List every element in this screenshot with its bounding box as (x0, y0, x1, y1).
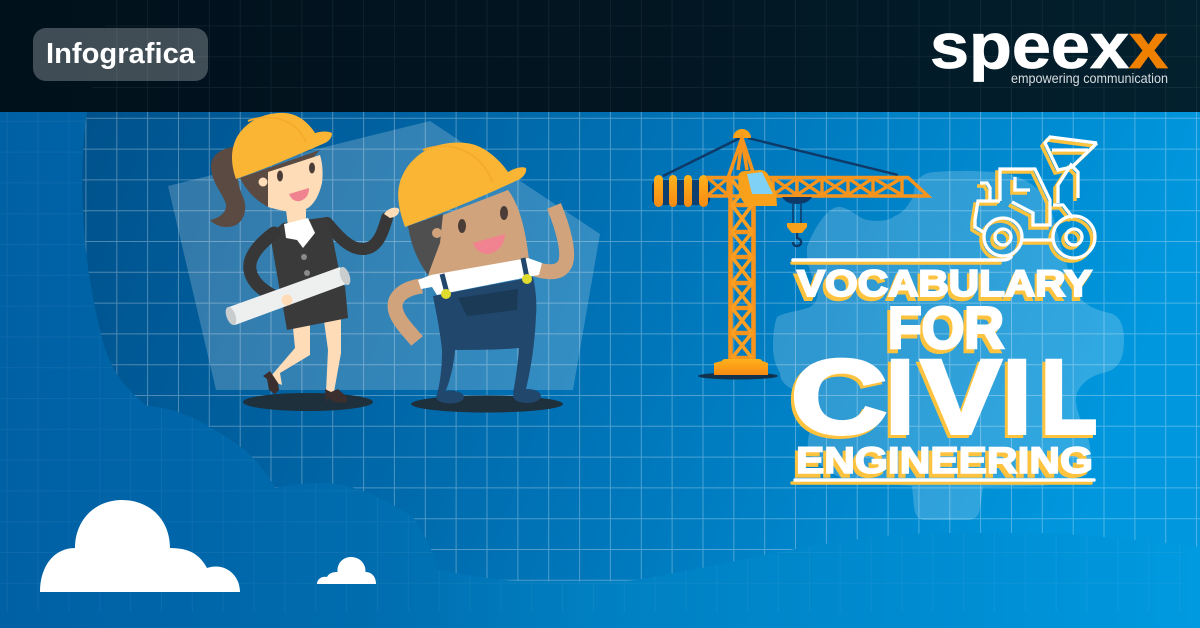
jacket buttons (301, 254, 307, 260)
crane A-frame (728, 138, 755, 178)
crane top (733, 129, 751, 138)
woman hand (384, 208, 399, 218)
icon: large cloud (40, 500, 240, 592)
man shadow (411, 396, 563, 412)
woman eyes (277, 170, 283, 182)
crane cab (738, 170, 777, 206)
cab window (747, 172, 773, 194)
man eyes (458, 219, 466, 233)
icon: loader (975, 137, 1097, 258)
skirt (280, 286, 348, 330)
woman left arm (250, 233, 280, 299)
title line: CIVIL shadow: I (883, 342, 911, 459)
character: man engineer (395, 143, 567, 412)
overalls pocket (458, 289, 518, 316)
title line: CIVIL: I (1003, 339, 1031, 456)
jib (706, 177, 928, 196)
ponytail (210, 147, 245, 227)
faint grid on top band (92, 0, 1200, 112)
title line: CIVIL shadow: V (918, 342, 998, 459)
woman mouth (289, 188, 309, 201)
title line: FOR: FOR (888, 296, 1004, 361)
title line: CIVIL shadow: I (1000, 342, 1028, 459)
crane stays (663, 138, 898, 176)
man left arm (395, 286, 422, 341)
icon: small cloud (317, 557, 376, 584)
neck (286, 206, 306, 226)
man shirt (418, 258, 542, 295)
collar (284, 218, 315, 248)
man feet (436, 390, 464, 404)
title line: ENGINEERING: ENGINEERING (796, 440, 1093, 481)
crane trolley (782, 197, 812, 204)
crane cables (793, 204, 801, 224)
badge: Infografica (33, 28, 208, 81)
woman legs (271, 318, 341, 392)
character: woman engineer (210, 113, 399, 411)
woman right arm (327, 218, 387, 249)
overall buttons (441, 289, 451, 299)
crane base (714, 359, 768, 375)
woman hard hat (232, 113, 332, 179)
blueprint grid (82, 112, 1200, 582)
title line: CIVIL shadow: C (788, 342, 884, 459)
backdrop polygon behind characters (168, 121, 600, 390)
logo: speexx: speex x (930, 10, 1168, 82)
hard hat ridge (248, 117, 306, 142)
panel behind title (773, 171, 1124, 520)
blueprint roll (224, 266, 352, 326)
man right arm (535, 206, 567, 272)
man hat ridge (423, 146, 493, 183)
mast bracing (732, 180, 752, 358)
overall straps (442, 258, 527, 293)
icon: tower crane (652, 129, 928, 380)
jacket (270, 217, 345, 292)
title line: CIVIL: C (791, 339, 887, 456)
icon: loader, yellow shadow (972, 140, 1094, 261)
woman ear (258, 178, 268, 186)
title line: VOCABULARY: VOCABULARY (797, 263, 1092, 304)
top band (0, 0, 1200, 112)
counterweight (652, 175, 710, 207)
title line: CIVIL shadow: L (1038, 342, 1094, 459)
title line: CIVIL: V (921, 339, 1001, 456)
logo: speexx: empowering communication (1011, 71, 1168, 86)
faint grid on blob (0, 112, 1183, 612)
title line: VOCABULARY shadow: VOCABULARY (794, 267, 1090, 308)
title: Vocabulary for Civil Engineering (788, 263, 1097, 485)
title line: FOR shadow: FOR (885, 300, 1001, 365)
top title underline (792, 257, 1011, 263)
woman hand on roll (282, 294, 292, 306)
woman shadow (243, 393, 373, 411)
man overalls (433, 277, 536, 395)
woman face (268, 155, 323, 212)
bottom title underline (792, 480, 1094, 483)
man head (428, 190, 529, 277)
man mouth (473, 234, 505, 254)
woman shoes (263, 371, 347, 403)
hair behind face (240, 150, 320, 207)
man hard hat (398, 143, 526, 227)
crane hook block (787, 223, 807, 233)
title line: ENGINEERING shadow: ENGINEERING (793, 444, 1089, 485)
man hair (408, 214, 443, 275)
mast (730, 178, 754, 361)
title line: CIVIL: I (886, 339, 914, 456)
crane hook (793, 233, 801, 246)
man ear (432, 228, 442, 238)
crane shadow (698, 372, 778, 380)
title line: CIVIL: L (1041, 339, 1097, 456)
badge: Infografica: Infografica (46, 38, 196, 70)
